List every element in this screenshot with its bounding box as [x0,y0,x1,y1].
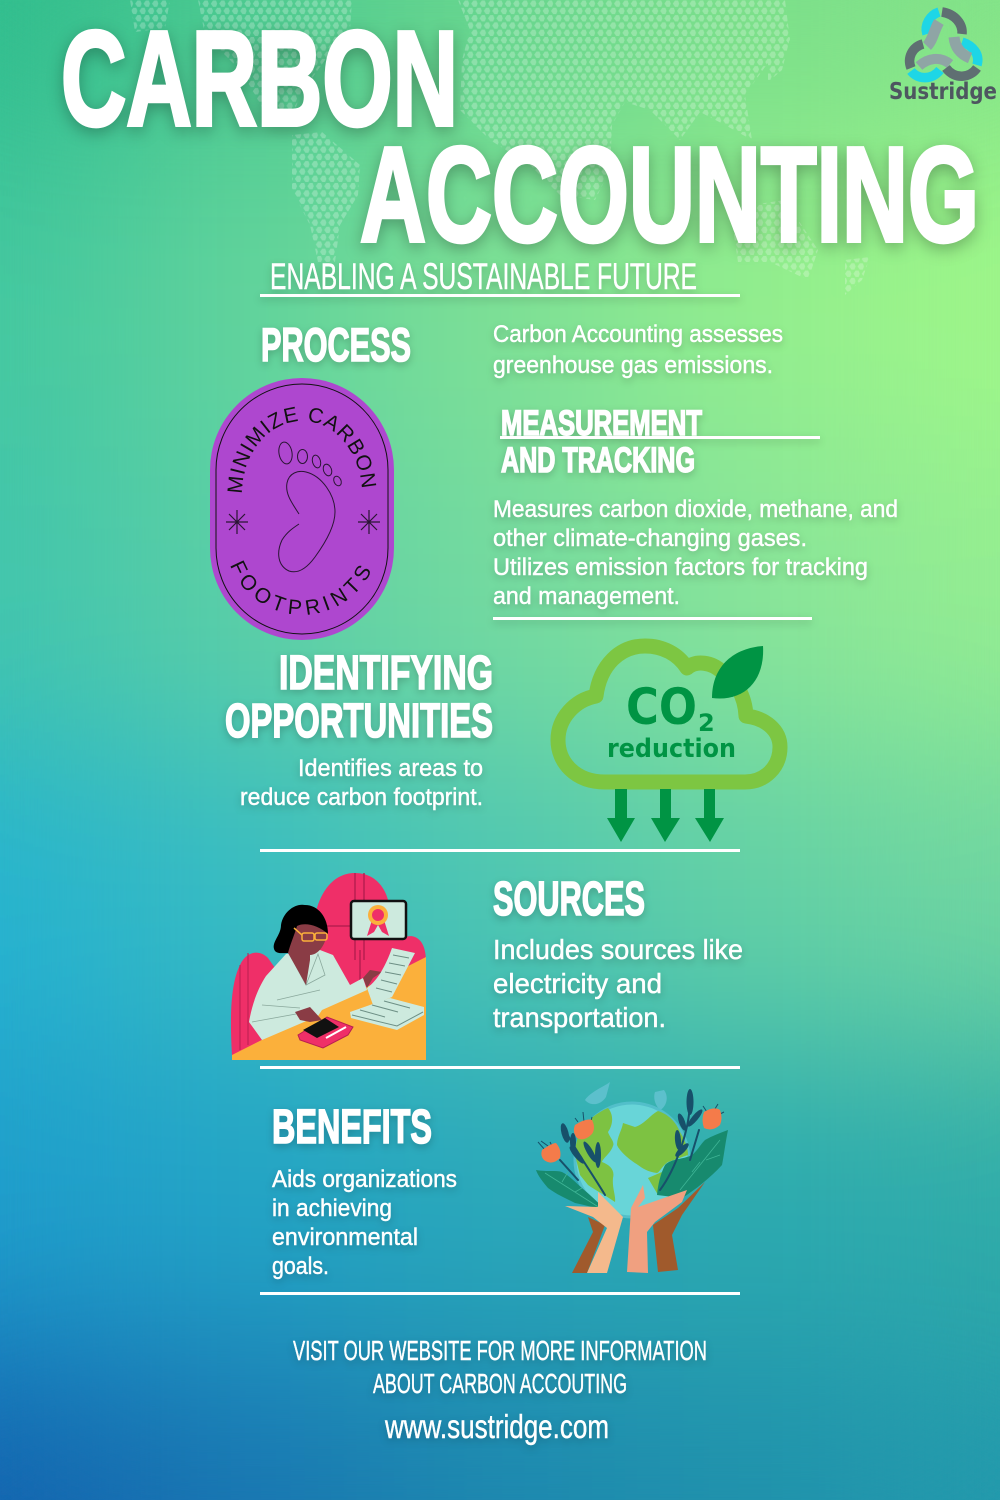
text: measurement body: Measures carbon dioxide, methane, and [493,496,898,523]
text: measurement body: Utilizes emission factors for tracking [493,554,868,581]
badge: minimize carbon footprints [210,378,394,640]
text: benefits body: goals. [272,1253,329,1280]
text: identifying body: Identifies areas to [298,755,483,782]
text: benefits body [272,1166,457,1280]
text: sources body: transportation. [493,1002,666,1033]
heading: identifying opportunities: IDENTIFYING [279,647,493,700]
text: intro [493,321,783,379]
world map dotted pattern [130,0,870,295]
divider [260,1066,740,1069]
footer: call to action [293,1335,707,1445]
footer: call to action: www.sustridge.com [384,1408,609,1445]
divider [260,1292,740,1295]
text: identifying body: reduce carbon footprint. [240,784,483,811]
heading: measurement and tracking: MEASUREMENT [501,404,702,443]
subtitle: ENABLING A SUSTAINABLE FUTURE [270,256,697,297]
heading: measurement and tracking [500,404,820,480]
footer: call to action: ABOUT CARBON ACCOUTING [373,1368,627,1399]
text: sources body: electricity and [493,968,662,999]
title: CARBON [61,3,458,154]
title [61,3,979,270]
text: measurement body: and management. [493,583,680,610]
text: intro: greenhouse gas emissions. [493,352,773,379]
heading: sources: SOURCES [493,873,645,926]
illustration: woman at desk [231,873,426,1060]
badge: minimize carbon footprints: MINIMIZE CARBON [227,406,376,492]
footer: call to action: VISIT OUR WEBSITE FOR MORE INFORMATION [293,1335,707,1366]
text: measurement body: other climate-changing gases. [493,525,807,552]
badge: minimize carbon footprints: FOOTPRINTS [230,560,370,615]
text: benefits body: environmental [272,1224,418,1251]
heading: identifying opportunities [225,647,493,748]
text: sources body: Includes sources like [493,934,743,965]
text: identifying body [240,755,483,811]
icon: CO2 reduction cloud: reduction [607,734,736,764]
text: intro: Carbon Accounting assesses [493,321,783,348]
heading: benefits: BENEFITS [272,1101,432,1154]
heading: measurement and tracking: AND TRACKING [501,441,695,480]
text: benefits body: in achieving [272,1195,392,1222]
icon: CO2 reduction cloud: 2 [698,709,715,737]
illustration: hands holding globe [536,1082,728,1273]
text: measurement body [493,496,898,620]
text: sources body [493,934,743,1033]
divider [260,849,740,852]
icon: CO2 reduction cloud: CO [626,678,697,736]
heading: process: PROCESS [261,318,411,371]
heading: identifying opportunities: OPPORTUNITIES [225,695,493,748]
text: benefits body: Aids organizations [272,1166,457,1193]
logo: Sustridge [889,12,997,105]
icon: CO2 reduction cloud [558,646,780,842]
